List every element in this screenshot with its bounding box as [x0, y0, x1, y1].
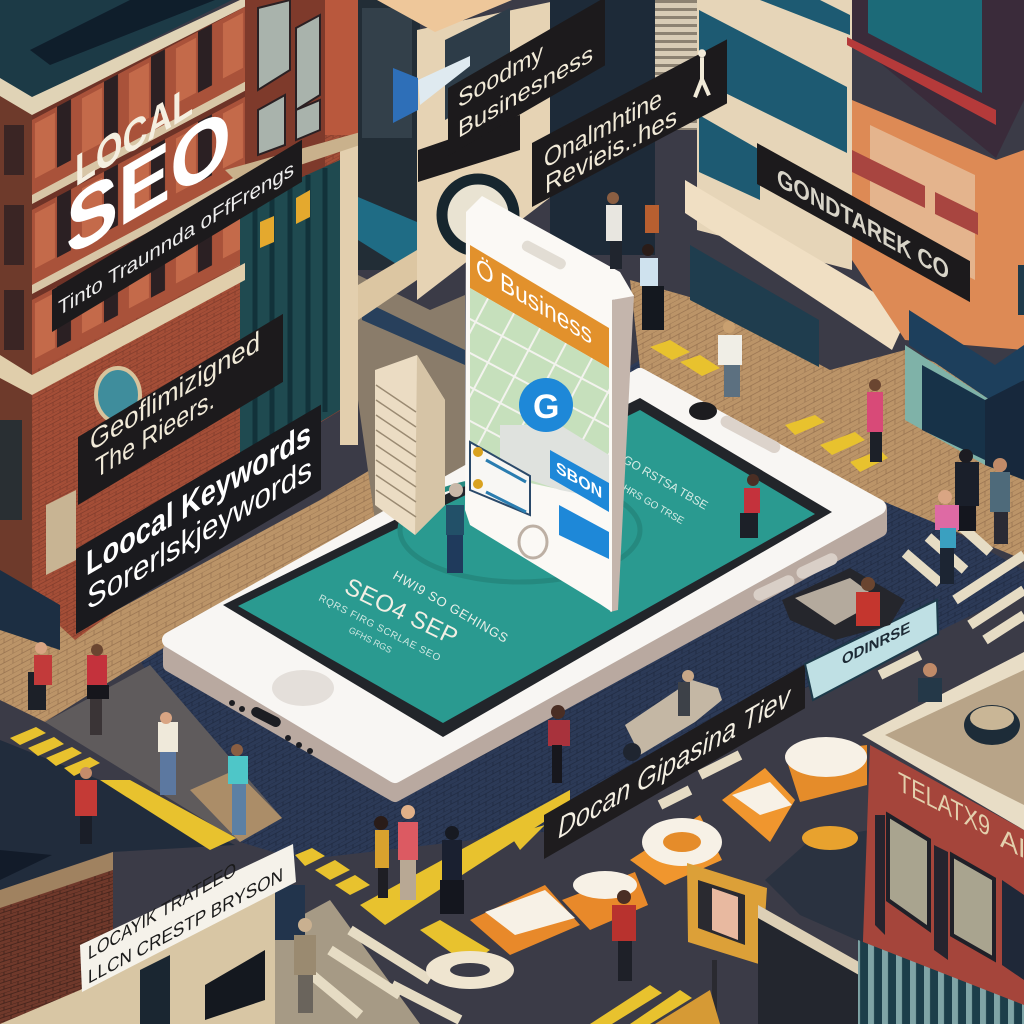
crosswalks: [10, 340, 888, 1024]
upper right bays: [245, 0, 325, 190]
cobbled plaza: [140, 360, 1024, 860]
sidewalks: [0, 280, 1024, 1024]
person: red shirt left: [28, 642, 52, 710]
sign: Soodmy Business: [448, 0, 605, 156]
person: man in tan coat: [294, 918, 316, 1013]
crosswalk stripes: [312, 518, 1024, 1020]
sign: business teal: [805, 600, 938, 700]
person: red top woman: [87, 644, 109, 735]
cart and driver: [623, 670, 722, 761]
car: [782, 568, 905, 640]
blue button SEO: [550, 450, 609, 512]
phone: lying flat: RQRS FIRG SCRLAE SEO: [317, 593, 442, 664]
sign: Geoflimizigned: [78, 311, 283, 505]
person: pink shirt with blue bag: [935, 490, 959, 584]
building: orange right: [847, 0, 1024, 480]
ground ring letter: [426, 951, 514, 989]
phone: lying flat: GFHS RGS: [347, 625, 394, 655]
pedestrians: [28, 192, 1010, 1013]
building: lower right red: [858, 652, 1024, 1024]
kiosk: [687, 863, 767, 1024]
charging port: [229, 700, 313, 754]
person: right group: [955, 449, 1010, 544]
home button: [272, 670, 334, 706]
sign: Locayik Trateeo: LLCN CRESTP BRYSON: [88, 864, 283, 989]
person: pink coat: [867, 379, 883, 462]
left return wall: [0, 90, 32, 600]
building: left brick tower: [0, 0, 375, 650]
person: runner on screen: [740, 474, 760, 538]
person: trio in plaza: [374, 805, 464, 914]
home ring: [519, 526, 547, 558]
side buttons: [752, 573, 796, 603]
person: red jacket with bag: [612, 890, 636, 981]
building: upper right glass: [685, 0, 909, 367]
dark teal storefront: [240, 160, 340, 470]
sign: Soodmy Business: Businesness: [458, 40, 593, 144]
lower shop: [758, 905, 859, 1024]
person: on phone in blue: [446, 483, 464, 573]
speaker: [718, 414, 782, 455]
screen text: SEO4 SEP: [340, 573, 462, 651]
server tower: [375, 355, 445, 535]
sign: Geoflimizigned: Geoflimizigned: [90, 325, 260, 458]
phone: standing: G: [533, 388, 559, 426]
person: red with cane: [75, 767, 97, 844]
building: lower right red: TELATX9: [898, 766, 990, 843]
ground floor windows: [46, 490, 76, 575]
person: teal shirt: [228, 744, 248, 835]
app header: [470, 245, 609, 368]
map: [470, 288, 609, 500]
cornice: [0, 263, 245, 395]
sign: Local Keywords: Loocal Keywords: [86, 413, 311, 583]
cream pilaster: [340, 145, 358, 445]
icon: blue check flag: [393, 56, 470, 123]
sign: Gondtarek Co: GONDTAREK CO: [777, 163, 949, 286]
building: lower left: [0, 852, 305, 1024]
icon: stick figure: [695, 49, 709, 97]
camera: [689, 402, 717, 420]
info card: [470, 442, 530, 515]
person: car driver: [856, 577, 880, 626]
banner: Docan Gipasina Tiev: Docan Gipasina Tiev: [558, 678, 792, 845]
sign: business teal: ODINRSE: [842, 619, 910, 669]
sign: Online Reviews: Revieis..hes: [545, 101, 677, 200]
person: white tall group: [606, 192, 664, 330]
icon: round G sign: [442, 179, 514, 251]
earpiece: [520, 239, 568, 271]
phone: standing: SBON: [556, 457, 602, 502]
sign: Online Reviews: Onalmhtine: [544, 82, 662, 174]
phone: lying flat: GO RSTSA TBSE: [620, 452, 710, 513]
roof: [0, 0, 232, 98]
phone: lying flat: HRS GO TRSE: [620, 483, 686, 527]
3D letters: [470, 737, 867, 955]
sign: Soodmy Business: Soodmy: [458, 39, 543, 114]
upper facade windows: [32, 0, 245, 372]
phone: lying flat: [170, 375, 880, 795]
road hazard debris: [655, 826, 870, 1024]
sign: Local SEO: SEO: [66, 88, 231, 277]
sign: tagline banner: Tinto Traunnda oFfFrengs: [58, 155, 294, 321]
person: crimson coat woman: [548, 705, 570, 783]
sign: Locayik Trateeo: LOCAYIK TRATEEO: [88, 858, 236, 965]
person: seated right: [918, 663, 942, 702]
person: white shirt: [158, 712, 178, 795]
phone: lying flat: HWI9 SO GEHINGS: [390, 568, 511, 646]
sign: Geoflimizigned: The Rieers.: [95, 382, 215, 485]
sign: Local SEO: LOCAL: [75, 74, 193, 197]
sign: Local Keywords: Sorerlskjeywords: [87, 448, 312, 618]
building: upper middle: [358, 0, 697, 520]
person: white shirt sidewalk: [718, 321, 742, 397]
shadow arc under standing phone: [400, 478, 640, 582]
arched window: [96, 368, 140, 422]
phone: standing: Ö Business: [476, 251, 592, 350]
screen: [223, 398, 832, 737]
blue button: [559, 505, 609, 559]
sign: Online Reviews: [532, 32, 727, 207]
map pin G: [519, 378, 573, 432]
phone: standing: [465, 196, 634, 612]
yellow flags: [260, 216, 274, 248]
